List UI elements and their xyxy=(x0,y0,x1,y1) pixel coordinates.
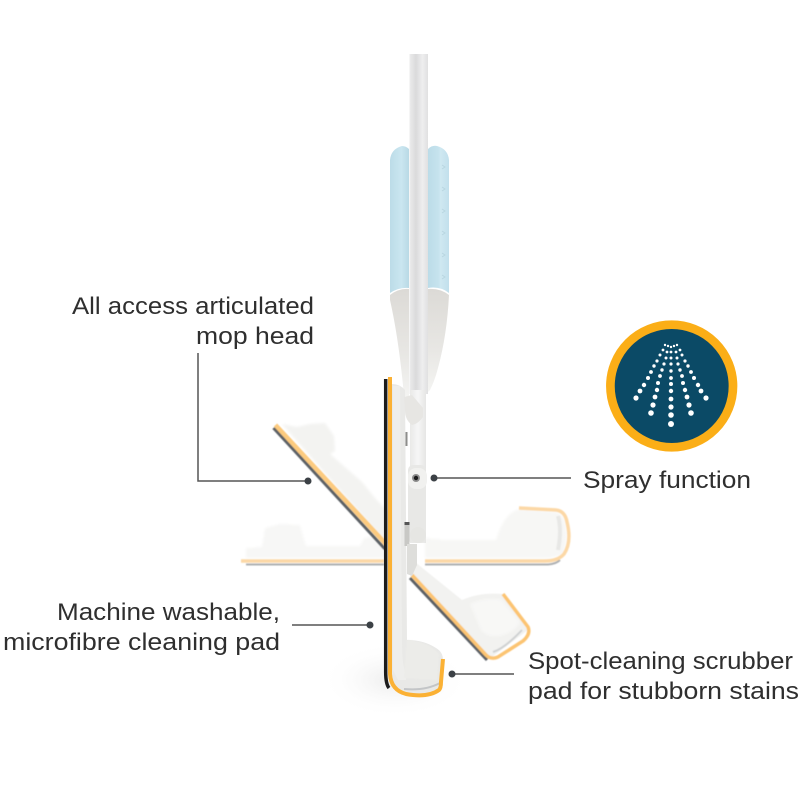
callout: cleaning pad: microfibre cleaning pad xyxy=(3,629,280,656)
mop head: diagonal position xyxy=(274,423,529,660)
floor shadow xyxy=(320,642,470,718)
callout: cleaning pad xyxy=(3,599,374,656)
callout: cleaning pad: Machine washable, xyxy=(57,599,280,626)
articulated joint and lower pole xyxy=(404,390,427,576)
blue grip xyxy=(390,146,449,293)
callout: scrubber pad: Spot-cleaning scrubber xyxy=(528,648,793,675)
spray droplets xyxy=(633,344,709,427)
mop head: horizontal position xyxy=(241,508,569,564)
callout: articulated mop head: All access articulated xyxy=(72,293,314,320)
mop handle pole xyxy=(410,54,428,394)
callout: spray function xyxy=(430,467,751,494)
callout: articulated mop head xyxy=(72,293,314,484)
cream handle collar xyxy=(390,289,449,398)
grip ticks xyxy=(442,165,445,279)
icon: spray function badge xyxy=(610,325,733,447)
callout: spray function: Spray function xyxy=(583,467,751,494)
callout: scrubber pad xyxy=(448,648,799,705)
callout: scrubber pad: pad for stubborn stains xyxy=(528,678,799,705)
callout: articulated mop head: mop head xyxy=(196,323,314,350)
mop head: upright position xyxy=(386,377,443,695)
